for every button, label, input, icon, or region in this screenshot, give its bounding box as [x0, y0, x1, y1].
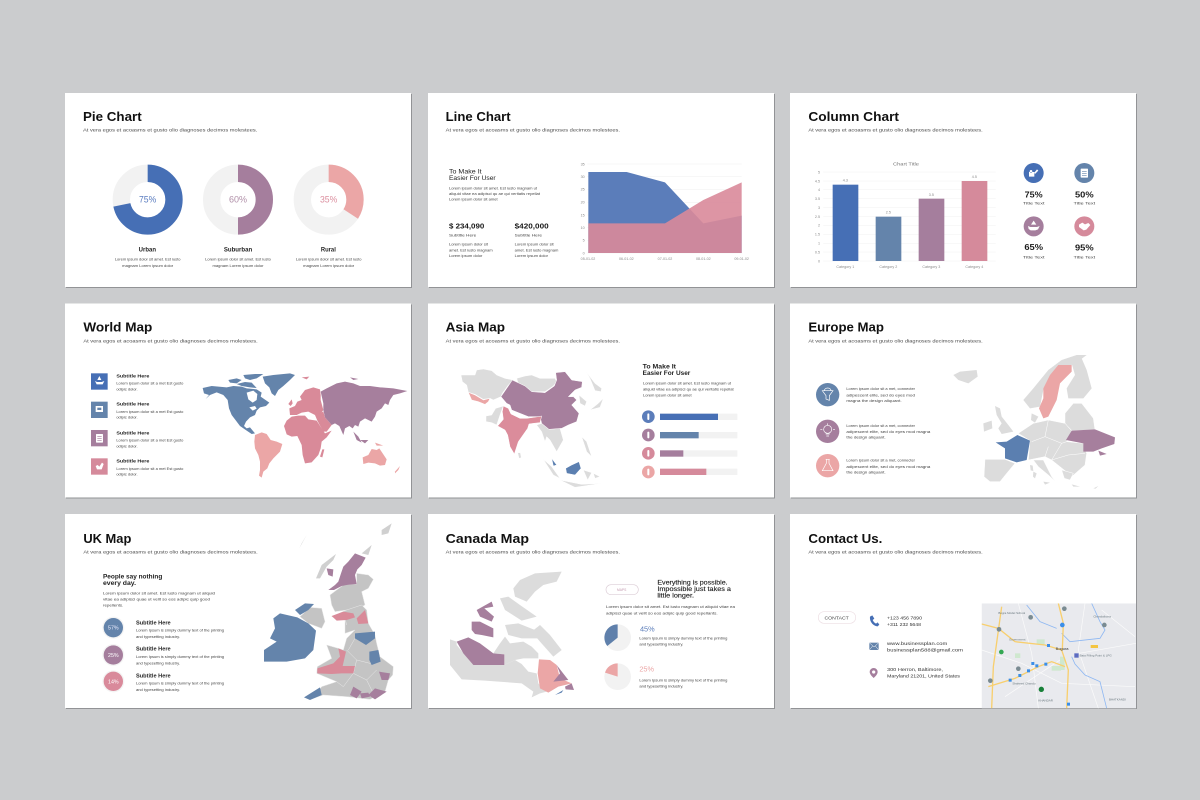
progress bar 3 [642, 447, 737, 460]
street map: Bogra Model School [998, 611, 1026, 615]
column chart: Category 1 [836, 265, 854, 269]
panel: column chart slide [790, 93, 1137, 288]
street map: Shaheed Chandu [1012, 682, 1036, 686]
stat: 234,090 [449, 224, 493, 258]
area chart: 08-01-02 [696, 257, 711, 261]
column chart: 0 [818, 259, 820, 263]
subtitle: pie chart: At vera egos et acoasms et gusto olio diagnoses decimos molestees. [83, 128, 257, 134]
list item: subtitle 1 [91, 373, 183, 391]
list item: subtitle 2: Lorem ipsum dolor sit a met Est gusto [116, 410, 183, 414]
text: phone numbers [887, 615, 922, 628]
area chart: 20 [581, 201, 585, 205]
stat icon: 65% [1023, 216, 1046, 259]
street map: Chandaikona [1093, 614, 1111, 618]
feature: light bulb icon and text: the design aliquant. [846, 436, 886, 440]
heading: everything is possible: Impossible just takes a [657, 586, 731, 593]
text block: easier for user [449, 168, 541, 202]
list item: subtitle 2: Subtitle Here [116, 402, 150, 407]
caption: rural: Rural [321, 247, 336, 254]
street map: BHATKANDI [1109, 698, 1126, 702]
text: web and email: www.businessplan.com [887, 641, 947, 647]
stat icon: 65%: 65% [1024, 242, 1043, 252]
stat icon: 95%: 95% [1075, 243, 1094, 253]
feature: flask icon and text: adipescent elite, sed do eyes mod magna [846, 465, 931, 469]
text: web and email: businessplan588@gmail.com [887, 647, 963, 653]
column chart: 0.5 [815, 250, 820, 254]
text block: people say nothing: Lorem ipsum dolor sit amet. Est iusto magnam ut aliquid [103, 592, 215, 596]
area chart: 07-01-02 [658, 257, 672, 261]
area chart: 25 [581, 188, 585, 192]
donut chart: suburban 60% [212, 173, 264, 226]
feature: light bulb icon and text [816, 420, 931, 443]
caption: urban: Urban [139, 247, 156, 254]
pill: maps [606, 585, 638, 595]
panel: world map slide [65, 304, 412, 498]
donut chart: suburban 60%: 60% [229, 195, 247, 205]
stat: 234,090: amet. Est iusto magnam [449, 248, 493, 252]
donut chart: rural 35% [302, 173, 355, 226]
donut chart: urban 75% [121, 173, 174, 226]
text block: people say nothing [103, 573, 215, 607]
stat: 25% [102, 644, 224, 666]
column chart: 4 [818, 188, 820, 192]
caption: suburban: Lorem ipsum dolor sit amet. Est iusto [205, 258, 271, 262]
pie stat: 45% [604, 624, 727, 651]
column chart: Category 2 [879, 265, 897, 269]
caption: suburban: magnam Lorem ipsum dolor [212, 264, 264, 268]
pie stat: 25%: Lorem Ipsum is simply dummy text of the printing [639, 679, 727, 683]
list item: subtitle 3: Subtitle Here [116, 430, 150, 435]
feature: filter icon and text: magna the design aliquant. [846, 399, 902, 403]
area chart [581, 162, 749, 261]
text block: easier for user: Lorem ipsum dolor sit amet [449, 198, 499, 202]
panel: europe map slide [790, 304, 1137, 498]
column chart: 2 [818, 224, 820, 228]
list item: subtitle 3: odipic dolor. [116, 444, 138, 448]
pie stat: 45%: Lorem Ipsum is simply dummy text of the printing [639, 637, 727, 641]
panel: canada map slide [428, 514, 775, 709]
stat: 14%: Subtitle Here [136, 673, 171, 679]
column chart: Category 4 [965, 265, 983, 269]
area chart: 09-01-02 [734, 257, 749, 261]
text block: people say nothing: vitae ea adipisci quae ut velit so eos adipic quip good [103, 598, 210, 602]
area chart: 15 [581, 213, 585, 217]
title: contact us: Contact Us. [808, 531, 882, 546]
feature: filter icon and text: adipescent elite, sed do eyes mod [846, 393, 915, 397]
caption: rural [296, 247, 361, 268]
stat: 234,090: Lorem ipsum dolor [449, 254, 483, 258]
text block: easier for user: aliquid vitae ea adipisci qu ae qui veritatis repellat [643, 388, 735, 392]
column chart: Category 3 [922, 265, 940, 269]
panel: line chart slide [428, 93, 775, 288]
subtitle: uk map: At vera egos et acoasms et gusto olio diagnoses decimos molestees. [83, 550, 258, 556]
list item: subtitle 1: Lorem ipsum dolor sit a met Est gusto [116, 382, 183, 386]
icon: phone [870, 615, 879, 626]
pill: contact [818, 612, 856, 623]
europe map [953, 355, 1115, 489]
feature: flask icon and text [816, 454, 931, 477]
text: phone numbers: +123 456 7890 [887, 615, 922, 621]
subtitle: column chart: At vera egos et acoasms et gusto olio diagnoses decimos molestees. [808, 128, 983, 134]
stat icon: 95%: Title Text [1073, 255, 1096, 259]
text block: easier for user [643, 363, 735, 397]
stat icon: 75%: Title Text [1023, 201, 1046, 205]
world map [203, 373, 407, 478]
stat: 25%: 25% [108, 653, 119, 659]
column chart: 1 [818, 242, 820, 246]
stat: 57%: and typesetting industry. [136, 635, 180, 639]
stat: 420,000 [515, 224, 558, 258]
column chart: 3 [818, 206, 820, 210]
pie stat: 25% [604, 663, 727, 690]
stat: 420,000: amet. Est iusto magnam [515, 248, 558, 252]
text block: easier for user: To Make It [449, 168, 482, 175]
column chart [815, 162, 996, 269]
icon: location pin [870, 668, 878, 678]
panel: pie chart slide [65, 93, 412, 288]
stat icon: 75%: 75% [1025, 189, 1043, 199]
stat: 234,090: $ 234,090 [449, 224, 484, 231]
stat icon: 95% [1073, 216, 1096, 259]
stat: 14%: and typesetting industry. [136, 688, 180, 692]
stat: 14%: Lorem Ipsum is simply dummy text of the printing [136, 682, 224, 686]
area chart: 35 [581, 162, 585, 166]
panel: uk map slide [65, 514, 412, 709]
subtitle: contact: At vera egos et acoasms et gusto olio diagnoses decimos molestees. [808, 550, 983, 556]
text: address: 300 Herron, Baltimore, [887, 667, 943, 673]
text: phone numbers: +311 232 5648 [887, 622, 921, 628]
column chart: 4.5 [815, 179, 820, 183]
list item: subtitle 2: odipic dolor. [116, 416, 138, 420]
stat icon: 50%: 50% [1075, 189, 1094, 199]
progress bar 2 [642, 429, 737, 441]
area chart: 0 [583, 251, 585, 255]
icon: mail [869, 643, 879, 650]
street map [982, 603, 1136, 708]
title: asia map: Asia Map [446, 320, 505, 335]
area chart: 06-01-02 [619, 257, 634, 261]
title: line chart: Line Chart [446, 109, 511, 124]
column chart: 4.5 [972, 175, 977, 179]
text block: easier for user: To Make It [643, 363, 677, 370]
pie stat: 45%: and typesetting industry. [639, 643, 683, 647]
feature: flask icon and text: Lorem ipsum dolor sit a met, connecter [846, 459, 916, 463]
stat: 420,000: Lorem ipsum dolor sit [515, 243, 555, 247]
text block: people say nothing: People say nothing [103, 573, 162, 580]
feature: light bulb icon and text: adipescent elite, sed do eyes mod magna [846, 430, 931, 434]
text block: people say nothing: repellents. [103, 603, 123, 607]
stat: 14%: 14% [108, 679, 119, 685]
stat: 14% [102, 670, 224, 692]
street map: Government [1009, 638, 1026, 642]
column chart: 1.5 [815, 233, 820, 237]
street map: Bata Filling Point & LPG [1080, 653, 1112, 657]
subtitle: asia map: At vera egos et acoasms et gusto olio diagnoses decimos molestees. [446, 339, 620, 345]
pie stat: 25%: and typesetting industry. [639, 685, 683, 689]
column chart: 2.5 [886, 211, 891, 215]
stat: 57%: Lorem Ipsum is simply dummy text of the printing [136, 629, 224, 633]
pie stat: 45%: 45% [640, 627, 655, 634]
heading: everything is possible: Everything is possible. [657, 579, 728, 586]
stat icon: 75% [1023, 163, 1046, 205]
uk and ireland map [264, 523, 393, 700]
text block: people say nothing: every day. [103, 580, 136, 587]
list item: subtitle 1: odipic dolor. [116, 387, 138, 391]
stat: 420,000: $420,000 [515, 224, 549, 231]
column chart: 5 [818, 170, 820, 174]
stat: 57%: Subtitle Here [136, 620, 171, 626]
area chart: 5 [583, 239, 585, 243]
progress bar 4 [642, 466, 737, 478]
list item: subtitle 4 [91, 458, 183, 477]
caption: urban: Lorem ipsum dolor sit amet. Est iusto [115, 258, 180, 262]
subtitle: canada map: At vera egos et acoasms et gusto olio diagnoses decimos molestees. [446, 550, 620, 556]
title: canada map: Canada Map [446, 531, 529, 546]
caption: rural: magnam Lorem ipsum dolor [303, 264, 355, 268]
street map: KHANDAR [1038, 699, 1054, 703]
text block: easier for user: Easier For User [449, 175, 496, 182]
stat: 25%: and typesetting industry. [136, 661, 180, 665]
list item: subtitle 4: odipic dolor. [116, 473, 138, 477]
feature: filter icon and text [816, 383, 916, 406]
list item: subtitle 3 [91, 430, 183, 448]
list item: subtitle 1: Subtitle Here [116, 373, 150, 378]
area chart: 30 [581, 175, 585, 179]
text: web and email [887, 641, 963, 653]
canada map [450, 572, 574, 697]
feature: light bulb icon and text: Lorem ipsum dolor sit a met, connecter [846, 424, 916, 428]
pill: contact: CONTACT [824, 615, 849, 621]
caption: rural: Lorem ipsum dolor sit amet. Est iusto [296, 258, 361, 262]
text block: easier for user: Lorem ipsum dolor sit amet [643, 393, 693, 397]
stat icon: 50% [1073, 163, 1096, 205]
caption: suburban: Suburban [224, 247, 252, 254]
panel: contact slide [790, 514, 1137, 709]
stat: 420,000: Lorem ipsum dolor [515, 254, 549, 258]
list item: subtitle 2 [91, 402, 183, 420]
stat: 57% [102, 617, 224, 639]
text block: intro: Lorem ipsum dolor sit amet. Est iusto magnam ut aliquid vitae ea [606, 605, 736, 609]
street map: Bogura [1056, 646, 1069, 651]
text block: easier for user: Lorem ipsum dolor sit amet. Est iusto magnam ut [449, 186, 538, 190]
donut chart: rural 35%: 35% [320, 195, 337, 205]
column chart: Chart Title [893, 162, 919, 168]
caption: urban: magnam Lorem ipsum dolor [122, 264, 174, 268]
stat: 234,090: Subtitle Here [449, 233, 476, 237]
text block: intro: adipisci quae ut velit so eos adipic quip good repellants. [606, 612, 718, 616]
title: column chart: Column Chart [808, 109, 900, 124]
text block: intro [606, 605, 736, 616]
title: world map: World Map [83, 320, 152, 335]
caption: urban [115, 247, 180, 268]
title: europe map: Europe Map [808, 320, 884, 335]
donut chart: urban 75%: 75% [139, 195, 156, 205]
stat icon: 65%: Title Text [1023, 255, 1046, 259]
stat icon: 50%: Title Text [1073, 201, 1096, 205]
text block: easier for user: Lorem ipsum dolor sit amet. Est iusto magnam ut [643, 382, 732, 386]
heading: everything is possible [657, 579, 731, 599]
progress bar 1 [642, 410, 737, 423]
panel: asia map slide [428, 304, 775, 498]
stat: 234,090: Lorem ipsum dolor sit [449, 243, 489, 247]
asia map [461, 369, 603, 487]
caption: suburban [205, 247, 271, 268]
stat: 25%: Subtitle Here [136, 647, 171, 653]
stat: 420,000: Subtitle Here [515, 233, 542, 237]
text block: easier for user: aliquid vitae ea adipisci qu ae qui veritatis repellat [449, 192, 541, 196]
list item: subtitle 4: Lorem ipsum dolor sit a met Est gusto [116, 467, 183, 471]
subtitle: world map: At vera egos et acoasms et gusto olio diagnoses decimos molestees. [83, 339, 258, 345]
text: address: Maryland 21201, United States [887, 674, 961, 680]
subtitle: europe map: At vera egos et acoasms et gusto olio diagnoses decimos molestees. [808, 339, 983, 345]
area chart: 10 [581, 226, 585, 230]
column chart: 3.5 [815, 197, 820, 201]
heading: everything is possible: little longer. [657, 592, 694, 599]
text: address [887, 667, 961, 680]
pie stat: 25%: 25% [639, 667, 654, 674]
column chart: 2.5 [815, 215, 820, 219]
text block: easier for user: Easier For User [643, 370, 691, 377]
pill: maps: MAPS [617, 588, 627, 592]
column chart: 4.3 [843, 179, 848, 183]
list item: subtitle 4: Subtitle Here [116, 459, 150, 464]
subtitle: line chart: At vera egos et acoasms et gusto olio diagnoses decimos molestees. [446, 128, 620, 134]
feature: filter icon and text: Lorem ipsum dolor sit a met, connecter [846, 387, 916, 391]
stat: 57%: 57% [108, 626, 119, 632]
stat: 25%: Lorem Ipsum is simply dummy text of the printing [136, 655, 224, 659]
column chart: 3.5 [929, 193, 934, 197]
list item: subtitle 3: Lorem ipsum dolor sit a met Est gusto [116, 439, 183, 443]
area chart: 05-01-02 [581, 257, 595, 261]
title: uk map: UK Map [83, 531, 131, 546]
feature: flask icon and text: the design aliquant. [846, 471, 886, 475]
title: pie chart: Pie Chart [83, 109, 142, 124]
